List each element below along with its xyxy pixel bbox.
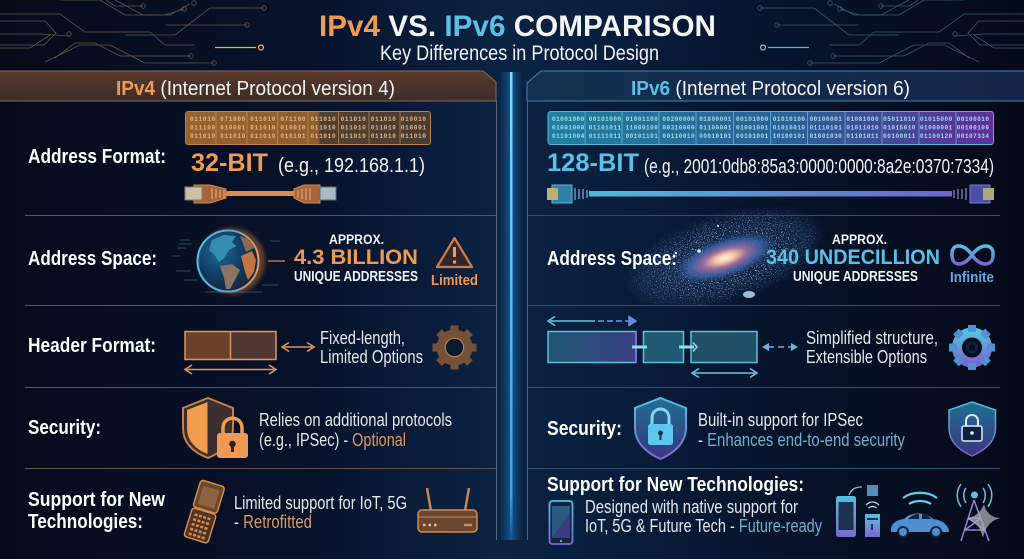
row: address format — [547, 111, 994, 203]
stat: 340 undecillion: UNIQUE ADDRESSES — [793, 269, 918, 285]
text: native support: IoT, 5G & Future Tech - Future-ready — [585, 515, 823, 536]
icon: shield with lock — [635, 398, 686, 459]
panel header: IPv4 — [0, 71, 496, 101]
stat: 4.3 billion: APPROX. — [329, 232, 384, 247]
text: relies on protocols: Relies on additional protocols — [259, 409, 452, 430]
row: address space — [547, 207, 995, 305]
circuit traces: left — [0, 0, 266, 65]
panel header: IPv4: IPv4 (Internet Protocol version 4) — [116, 77, 395, 100]
text: built-in support — [698, 409, 906, 450]
panel header: IPv6 — [527, 71, 1024, 101]
row: header format — [548, 316, 995, 378]
128-bit value: 128-BIT — [547, 149, 639, 177]
example address: (e.g., 192.168.1.1) — [278, 154, 425, 177]
row: new technologies: Technologies: — [28, 511, 143, 533]
panel header: IPv6: IPv6 (Internet Protocol version 6) — [631, 77, 910, 100]
binary block: 01001000 01101011 11000100 00310000 01100001 01001001 01010010 01110101 01011010 01015010 01000001 00100109 — [552, 124, 989, 132]
icon: galaxy — [626, 207, 824, 305]
title — [319, 10, 716, 65]
icon: gear — [432, 326, 476, 370]
binary block: 01001000 00101000 01001100 00200000 01800001 00101000 01010100 00100001 01081000 05011010 01015000 00100010 — [552, 116, 989, 123]
row: address space: Address Space: — [28, 248, 157, 270]
binary block: 01101004 01111011 00101101 00110010 00010101 00101001 10100101 01001030 01101011 00100011 01100120 00107334 — [552, 133, 989, 140]
stat: 340 undecillion: 340 UNDECILLION — [766, 246, 940, 269]
binary block — [186, 111, 430, 144]
row: security — [547, 398, 996, 459]
row: security — [28, 398, 452, 458]
circuit traces: right — [758, 0, 1024, 65]
stat: 4.3 billion: UNIQUE ADDRESSES — [294, 269, 418, 285]
subtitle: Key Differences in Protocol Design — [380, 42, 659, 65]
stat: 340 undecillion: APPROX. — [832, 232, 887, 247]
text: fixed-length: Limited Options — [320, 346, 423, 367]
text: limited support: Limited support for IoT, 5G — [234, 492, 407, 513]
binary block: 011010 011010 011010 010101 011010 011010 011010 011010 — [190, 133, 426, 140]
text: simplified structure: Simplified structure, — [806, 327, 938, 348]
text: fixed-length — [320, 327, 423, 367]
text: native support — [585, 496, 823, 536]
text: simplified structure — [806, 327, 938, 367]
icon: router — [418, 488, 477, 532]
icon: gear — [949, 325, 995, 370]
panel: IPv6 — [527, 71, 1024, 544]
row: address space: Address Space: — [547, 248, 677, 270]
icon: globe — [172, 228, 285, 294]
row: header format — [28, 326, 476, 374]
center divider — [499, 72, 523, 542]
icon: devices — [836, 485, 880, 537]
icon: infinity — [950, 246, 994, 286]
row: address format — [28, 111, 430, 203]
icon: shield and lock — [183, 398, 248, 458]
text: built-in support: Built-in support for IPSec — [698, 409, 863, 430]
text: relies on protocols — [259, 409, 452, 450]
icon: smartphone — [550, 501, 572, 544]
stat: 4.3 billion — [294, 232, 418, 285]
row: security: Security: — [547, 418, 622, 440]
icon: ethernet cable — [185, 185, 336, 203]
binary block: 011010 071800 011010 071100 011010 011010 011010 010010 — [190, 116, 426, 123]
binary block — [548, 111, 994, 144]
diagram: extensible header — [548, 316, 798, 378]
row: new technologies: Support for New Technologies: — [547, 474, 804, 496]
icon: warning — [431, 238, 478, 289]
text: fixed-length: Fixed-length, — [320, 327, 405, 348]
icon: flip phone — [184, 480, 225, 543]
icon: connected car — [891, 493, 949, 537]
row: address space — [28, 228, 478, 294]
title: IPv4 VS. IPv6 COMPARISON — [319, 10, 716, 43]
icon: sparkle watermark — [966, 504, 1001, 538]
text: native support: Designed with native support for — [585, 496, 798, 517]
text: simplified structure: Extensible Options — [806, 346, 927, 367]
icon: infinity: Infinite — [950, 269, 994, 286]
text: built-in support: - Enhances end-to-end security — [698, 429, 906, 450]
row: new technologies: Support for New — [28, 489, 165, 511]
row: header format: Header Format: — [28, 335, 156, 357]
stat: 340 undecillion — [766, 232, 940, 285]
binary block: 011100 010001 011010 010010 011010 011010 011010 010001 — [190, 124, 426, 132]
icon: warning: Limited — [431, 272, 478, 289]
32-bit value: 32-BIT — [191, 149, 268, 177]
panel: IPv4 — [0, 71, 496, 543]
icon: small shield — [949, 402, 996, 456]
icon: cell tower — [957, 484, 992, 541]
icon: ethernet cable — [547, 185, 994, 203]
text: limited support: - Retrofitted — [234, 511, 312, 532]
row: new technologies — [547, 474, 1001, 544]
diagram: fixed header — [185, 331, 314, 374]
text: limited support — [234, 492, 407, 532]
stat: 4.3 billion: 4.3 BILLION — [294, 246, 418, 269]
text: relies on protocols: (e.g., IPSec) - Optional — [259, 429, 406, 450]
row: address format: Address Format: — [28, 146, 166, 168]
row: security: Security: — [28, 417, 101, 439]
row: new technologies — [28, 480, 477, 543]
